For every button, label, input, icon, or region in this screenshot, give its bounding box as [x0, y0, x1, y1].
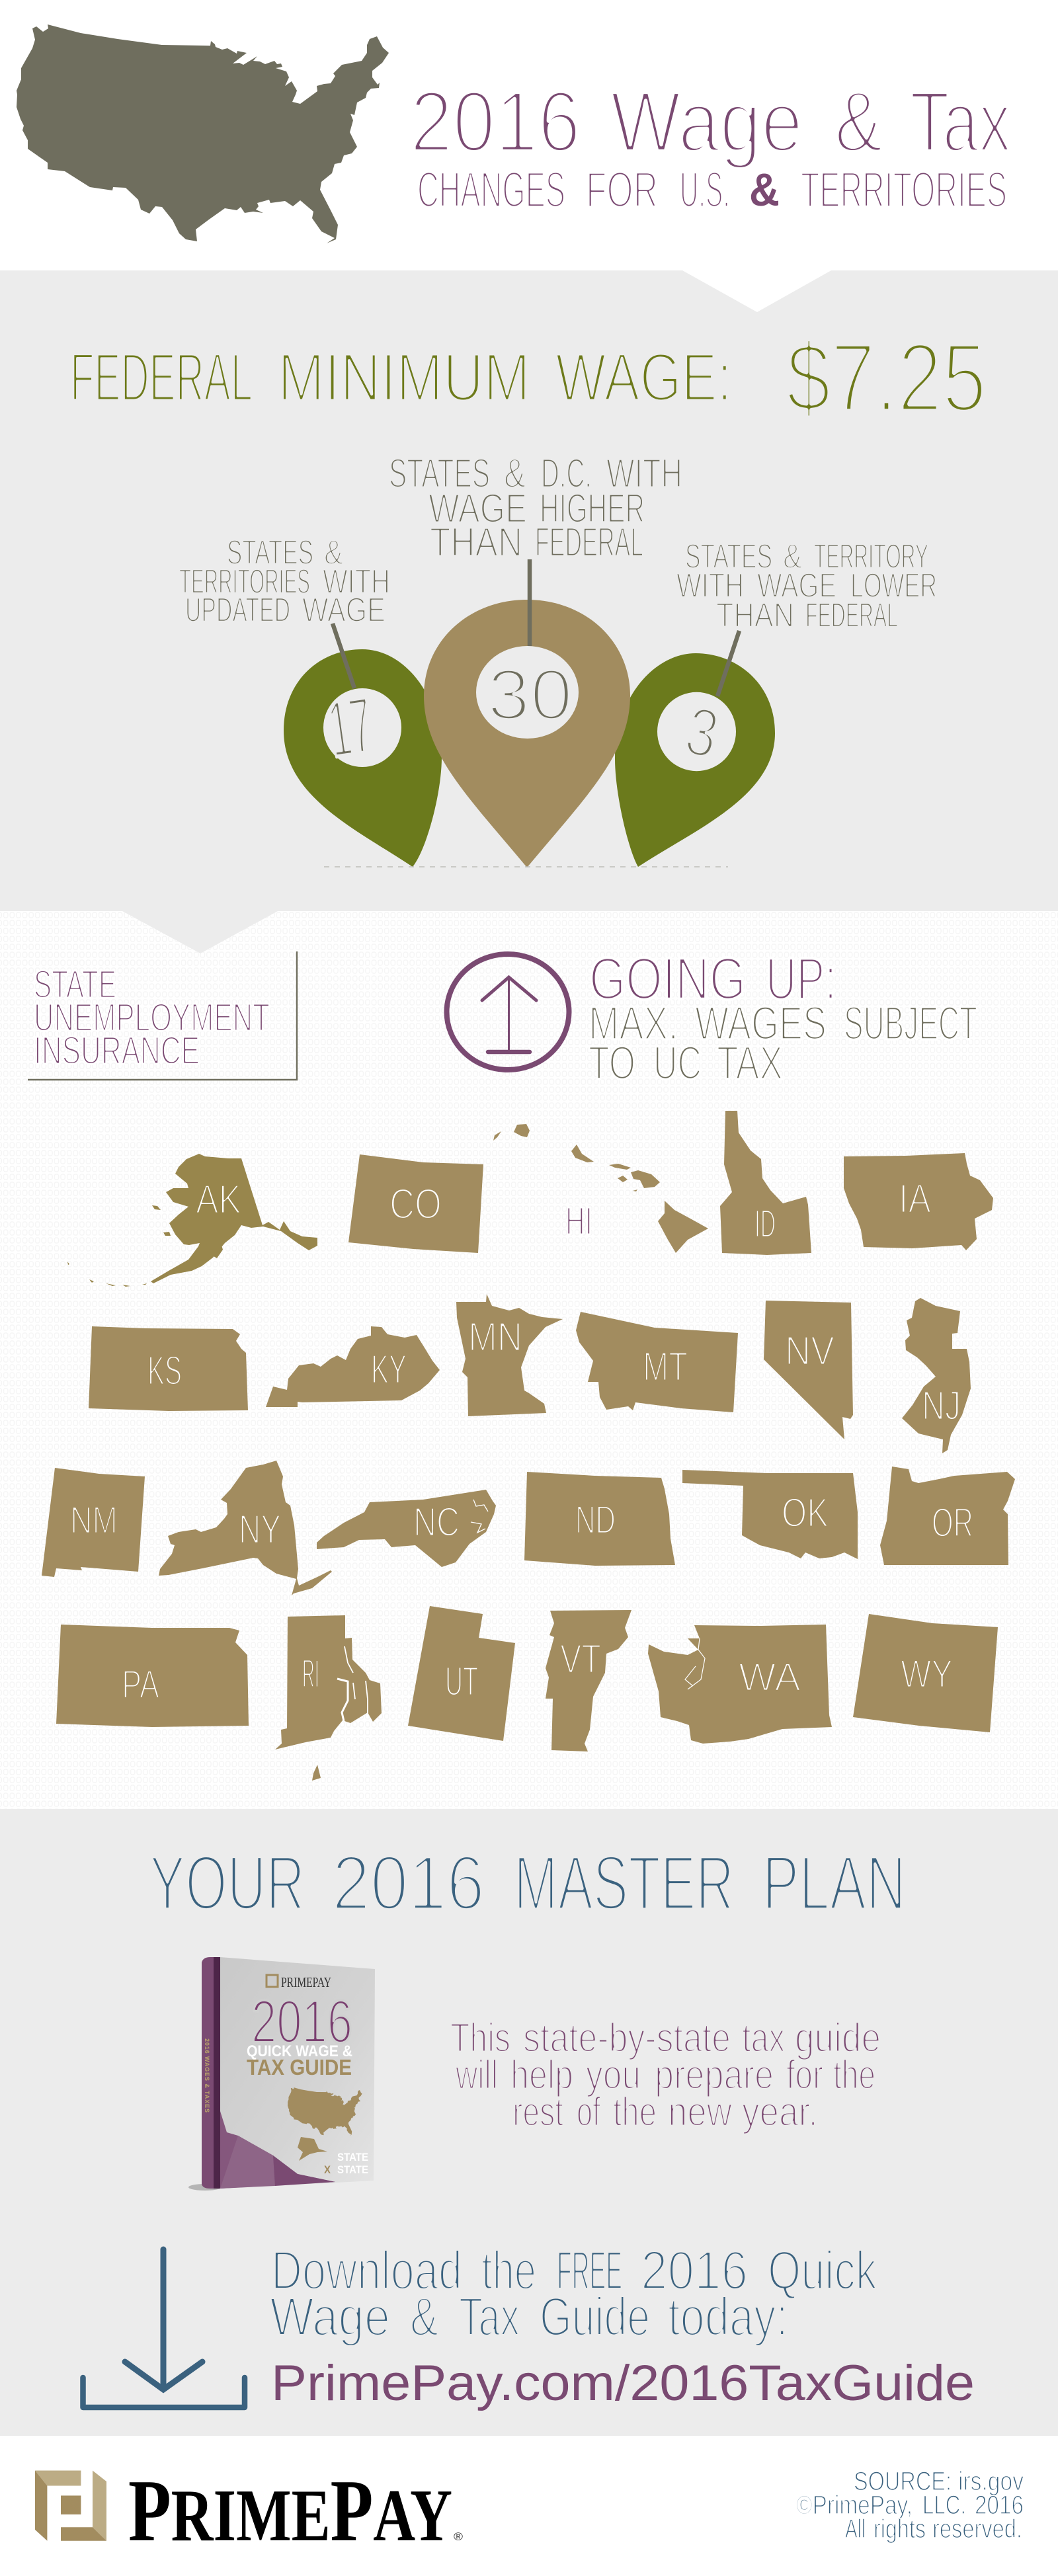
state: Iowa: [844, 1153, 993, 1250]
state: Utah: UT: [445, 1659, 478, 1705]
state: Nevada: NV: [785, 1328, 835, 1374]
label: states and territories with updated wage: [179, 534, 390, 629]
heading: your 2016 master plan: MASTER: [514, 1839, 734, 1926]
state: Hawaii: HI: [565, 1199, 592, 1243]
image: tax guide book: X: [324, 2163, 331, 2176]
state: Montana: MT: [643, 1344, 688, 1390]
label: states and D.C. higher than federal: WITH: [606, 451, 682, 497]
text: state-by-state tax guide: year.: [742, 2089, 818, 2135]
text: source and copyright: 2016: [975, 2491, 1024, 2520]
text: download call to action: Download: [271, 2239, 462, 2301]
state: Kansas: [89, 1326, 248, 1411]
label: states and territories with updated wage: UPDATED: [185, 591, 290, 629]
state: Pennsylvania: [56, 1625, 249, 1727]
label: states and D.C. higher than federal: &: [504, 451, 526, 497]
text: state-by-state tax guide: help: [510, 2052, 573, 2098]
box: state unemployment insurance: STATE: [34, 963, 116, 1006]
state: New Jersey: [902, 1298, 971, 1453]
heading: your 2016 master plan: YOUR: [149, 1839, 305, 1926]
panel: master plan: [0, 1809, 1058, 2436]
state: North Carolina: NC: [413, 1500, 460, 1545]
text: state-by-state tax guide: [450, 2015, 881, 2135]
map: United States silhouette: [17, 24, 389, 243]
text: state-by-state tax guide: rest: [512, 2089, 563, 2135]
text: state-by-state tax guide: will: [455, 2052, 498, 2098]
text: state-by-state tax guide: guide: [795, 2015, 881, 2061]
label: states and D.C. higher than federal: FEDERAL: [535, 520, 643, 565]
text: max wages subject to UC tax: WAGES: [695, 998, 827, 1050]
text: download call to action: today:: [668, 2286, 788, 2347]
state: Kentucky: KY: [371, 1347, 407, 1392]
state: Oklahoma: OK: [782, 1490, 829, 1536]
state: North Dakota: [524, 1472, 675, 1566]
heading: federal minimum wage: WAGE:: [555, 339, 732, 415]
state: Nevada: [764, 1301, 853, 1439]
state: Alaska: AK: [196, 1177, 241, 1223]
heading: federal minimum wage: [70, 339, 732, 415]
text: source and copyright: ©PrimePay,: [796, 2491, 913, 2520]
logo: PrimePay wordmark: ®: [454, 2530, 464, 2543]
state: Oklahoma: [682, 1470, 858, 1559]
text: max wages subject to UC tax: TAX: [717, 1037, 783, 1090]
text: state-by-state tax guide: new: [668, 2089, 732, 2135]
text: source and copyright: All: [845, 2515, 866, 2544]
text: max wages subject to UC tax: TO: [589, 1037, 635, 1090]
state: Washington: WA: [739, 1655, 801, 1699]
icon: download arrow: [83, 2249, 245, 2407]
text: max wages subject to UC tax: [589, 998, 977, 1090]
label: states and territory lower than federal: LOWER: [850, 567, 937, 605]
state: Wyoming: [853, 1614, 998, 1732]
title: &: [834, 73, 883, 170]
state: Colorado: CO: [389, 1180, 442, 1228]
pin chart: [284, 559, 775, 867]
text: state-by-state tax guide: the: [613, 2089, 657, 2135]
state: Colorado: [348, 1154, 483, 1253]
image: tax guide book: PRIMEPAY: [281, 1974, 331, 1990]
text: source and copyright: [796, 2467, 1024, 2544]
text: state-by-state tax guide: state-by-state: [523, 2015, 731, 2061]
text: download call to action: [270, 2239, 877, 2347]
panel: federal minimum wage: [0, 270, 1058, 911]
text: state-by-state tax guide: prepare: [655, 2052, 774, 2098]
title: [410, 73, 1011, 170]
pin: 17 states and territories: 17: [323, 680, 378, 774]
text: state-by-state tax guide: This: [450, 2015, 510, 2061]
title: Tax: [910, 73, 1011, 170]
label: states and D.C. higher than federal: STATES: [389, 451, 490, 497]
text: max wages subject to UC tax: MAX.: [589, 998, 678, 1050]
state: Rhode Island: [275, 1615, 382, 1781]
text: max wages subject to UC tax: SUBJECT: [844, 998, 977, 1050]
label: states and territories with updated wage: WITH: [323, 563, 390, 601]
title: Wage: [610, 73, 803, 170]
title: 2016: [410, 73, 581, 170]
state: Alaska: [67, 1154, 317, 1287]
text: download call to action: Guide: [540, 2286, 650, 2347]
text: state-by-state tax guide: tax: [742, 2015, 785, 2061]
label: states and territories with updated wage: STATES: [227, 534, 313, 572]
image: tax guide book: [188, 1957, 375, 2191]
heading: federal minimum wage: MINIMUM: [278, 339, 530, 415]
heading: going up: UP:: [766, 946, 836, 1012]
label: states and D.C. higher than federal: D.C.: [541, 451, 592, 497]
subtitle: U.S.: [680, 162, 730, 218]
label: states and territory lower than federal: &: [783, 538, 802, 576]
label: states and territories with updated wage: TERRITORIES: [179, 563, 310, 601]
box: state unemployment insurance: [28, 951, 297, 1080]
pin: 3 states and territory: [615, 653, 775, 867]
state: Kentucky: [266, 1326, 440, 1407]
image: tax guide book: QUICK WAGE &: [247, 2042, 352, 2060]
footer: [0, 2436, 1058, 2576]
label: states and territory lower than federal: FEDERAL: [805, 596, 898, 635]
text: source and copyright: reserved.: [932, 2515, 1022, 2544]
heading: your 2016 master plan: 2016: [332, 1839, 485, 1926]
state: Oregon: OR: [932, 1500, 973, 1546]
image: tax guide book: STATE: [337, 2163, 368, 2176]
image: tax guide book: STATE: [337, 2151, 368, 2163]
state: New York: [159, 1461, 332, 1595]
panel: state unemployment insurance: [0, 911, 1058, 1809]
text: download call to action: FREE: [557, 2239, 622, 2301]
state: Wyoming: WY: [901, 1652, 953, 1696]
text: download call to action: 2016: [641, 2239, 748, 2301]
label: states and D.C. higher than federal: WAGE: [428, 486, 527, 532]
panel: header: [0, 0, 1058, 270]
text: source and copyright: LLC.: [922, 2491, 966, 2520]
text: source and copyright: SOURCE:: [854, 2467, 952, 2496]
box: state unemployment insurance: UNEMPLOYMENT: [34, 996, 270, 1039]
pin: 3 states and territory: 3: [679, 692, 725, 774]
subtitle: CHANGES: [417, 162, 565, 218]
image: tax guide book: 2016 WAGES & TAXES: [204, 2038, 210, 2113]
state: New Mexico: [42, 1468, 145, 1577]
text: state-by-state tax guide: for: [786, 2052, 823, 2098]
image: tax guide book: 2016: [251, 1988, 352, 2056]
subtitle: [417, 162, 1007, 218]
icon: up arrow in circle: [447, 954, 569, 1070]
text: download call to action: Wage: [270, 2286, 390, 2347]
text: state-by-state tax guide: you: [586, 2052, 641, 2098]
state: Pennsylvania: PA: [122, 1662, 159, 1707]
state: Minnesota: MN: [468, 1314, 522, 1360]
state: Idaho: ID: [754, 1202, 776, 1246]
label: states and territory lower than federal: TERRITORY: [814, 538, 928, 576]
leader lines: [333, 559, 739, 696]
link: guide URL: PrimePay.com/2016TaxGuide: [271, 2355, 975, 2411]
logo: PrimePay mark: [35, 2470, 106, 2541]
state: Rhode Island: RI: [302, 1652, 319, 1696]
heading: your 2016 master plan: PLAN: [762, 1839, 906, 1926]
pin: 30 states and D.C.: [424, 600, 630, 867]
state: Oregon: [880, 1467, 1015, 1565]
text: source and copyright: rights: [874, 2515, 926, 2544]
text: download call to action: Quick: [768, 2239, 877, 2301]
subtitle: &: [749, 164, 780, 216]
state: Vermont: VT: [560, 1636, 601, 1682]
pin: 17 states and territories: [284, 649, 442, 867]
text: state-by-state tax guide: of: [577, 2089, 601, 2135]
subtitle: FOR: [586, 162, 658, 218]
state: New Jersey: NJ: [922, 1383, 961, 1429]
heading: federal minimum wage: FEDERAL: [70, 339, 253, 415]
text: state-by-state tax guide: the: [833, 2052, 875, 2098]
text: download call to action: Tax: [459, 2286, 520, 2347]
text: max wages subject to UC tax: UC: [653, 1037, 702, 1090]
label: states and territory lower than federal: WAGE: [757, 567, 836, 605]
label: states and territory lower than federal: [676, 538, 937, 635]
label: states and territory lower than federal: WITH: [676, 567, 744, 605]
state: North Dakota: ND: [575, 1498, 616, 1542]
label: states and territory lower than federal: THAN: [716, 596, 794, 635]
state: Minnesota: [456, 1294, 563, 1416]
logo: PrimePay wordmark: PRIMEPAY: [128, 2462, 452, 2559]
state: Idaho: [720, 1111, 811, 1255]
label: states and D.C. higher than federal: HIGHER: [540, 486, 645, 532]
state: Kansas: KS: [147, 1348, 182, 1394]
heading: your 2016 master plan: [149, 1839, 906, 1926]
text: download call to action: &: [410, 2286, 438, 2347]
label: states and D.C. higher than federal: THAN: [430, 520, 522, 565]
state: Hawaii: [493, 1124, 708, 1253]
pin: 30 states and D.C.: 30: [487, 655, 573, 735]
label: states and territory lower than federal: STATES: [685, 538, 772, 576]
label: states and territories with updated wage: WAGE: [302, 591, 386, 629]
state: North Carolina: [317, 1490, 496, 1567]
label: states and territories with updated wage: &: [324, 534, 343, 572]
text: download call to action: the: [481, 2239, 536, 2301]
figure: $7.25: $7.25: [786, 323, 987, 432]
image: tax guide book: TAX GUIDE: [247, 2055, 352, 2079]
label: states and D.C. higher than federal: [389, 451, 682, 565]
box: state unemployment insurance: INSURANCE: [34, 1029, 200, 1072]
state: New York: NY: [239, 1507, 281, 1552]
state: Iowa: IA: [899, 1176, 932, 1222]
state: Washington: [648, 1625, 832, 1744]
heading: going up: GOING: [589, 946, 746, 1012]
text: source and copyright: irs.gov: [958, 2467, 1024, 2496]
state: Vermont: [546, 1610, 631, 1751]
state: New Mexico: NM: [70, 1499, 118, 1542]
state: Montana: [576, 1312, 738, 1412]
state: Utah: [408, 1606, 515, 1741]
